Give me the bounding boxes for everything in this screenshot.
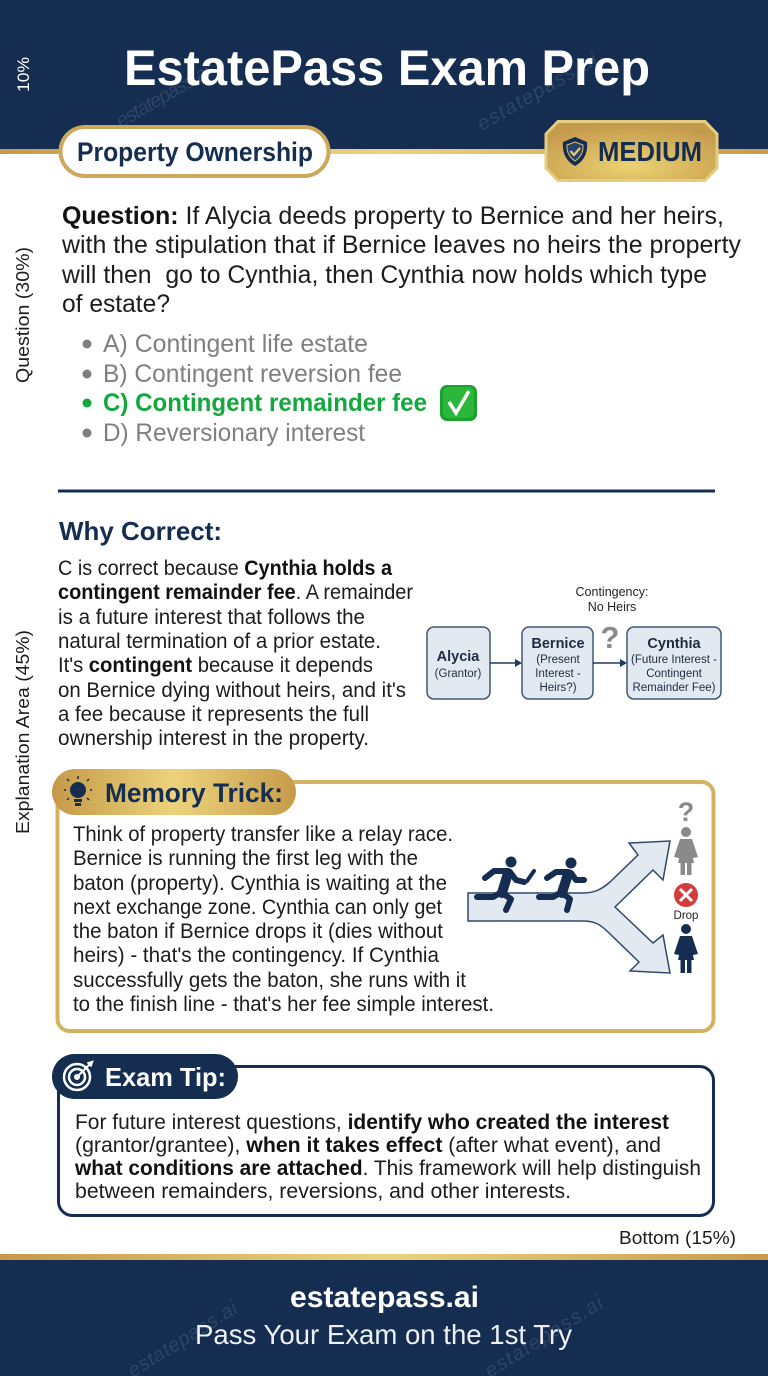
watermarks in footer bbox=[124, 1292, 608, 1376]
forked arrow bbox=[468, 841, 670, 973]
explanation text: on Bernice dying without heirs, and it's bbox=[58, 679, 406, 702]
memory trick text: the baton if Bernice drops it (dies without bbox=[73, 919, 443, 943]
question text: of estate? bbox=[62, 290, 170, 318]
gray question mark: ? bbox=[678, 797, 694, 827]
exam tip text: what conditions are attached. This framework will help distinguish bbox=[74, 1157, 701, 1180]
box: Cynthia: Remainder Fee) bbox=[632, 682, 716, 694]
box: Alycia bbox=[427, 627, 490, 699]
exam tip heading pill bbox=[52, 1054, 238, 1099]
header band bbox=[0, 0, 768, 154]
exam tip text: between remainders, reversions, and other interests. bbox=[75, 1180, 571, 1203]
question text: will then go to Cynthia, then Cynthia now holds which type bbox=[61, 261, 707, 289]
question mark: ? bbox=[601, 620, 619, 655]
difficulty badge: MEDIUM bbox=[598, 136, 702, 167]
panel: memory trick bbox=[52, 769, 714, 1031]
answer options bbox=[82, 330, 427, 447]
icon: target bbox=[64, 1061, 93, 1090]
second runner bbox=[539, 858, 584, 910]
box: Cynthia: Cynthia bbox=[647, 636, 702, 652]
exam tip heading pill: Exam Tip: bbox=[105, 1062, 226, 1092]
footer band bbox=[0, 1254, 768, 1376]
contingency label bbox=[576, 585, 648, 614]
category pill: Property Ownership bbox=[77, 137, 313, 167]
title: EstatePass Exam Prep bbox=[124, 40, 650, 96]
gray person bbox=[674, 827, 698, 875]
memory trick text: heirs) - that's the contingency. If Cynthia bbox=[73, 943, 439, 967]
explanation text: contingent remainder fee. A remainder bbox=[58, 581, 413, 604]
box: Alycia: (Grantor) bbox=[435, 668, 481, 680]
contingency label: No Heirs bbox=[588, 600, 636, 614]
footer website: estatepass.ai bbox=[290, 1281, 479, 1314]
heading: why correct: Why Correct: bbox=[59, 516, 222, 546]
explanation text: C is correct because Cynthia holds a bbox=[58, 557, 392, 580]
explanation text: is a future interest that follows the bbox=[58, 606, 365, 629]
memory trick heading pill bbox=[52, 769, 296, 815]
box: Bernice: (Present bbox=[536, 654, 581, 666]
arrow: Bernice to Cynthia bbox=[593, 659, 627, 667]
box: Bernice bbox=[522, 627, 593, 699]
box: Cynthia bbox=[627, 627, 721, 699]
navy person bbox=[674, 924, 698, 973]
box: Cynthia: (Future Interest - bbox=[631, 654, 717, 666]
watermarks in header: estatepass.ai bbox=[474, 49, 602, 135]
icon: shield bbox=[563, 137, 587, 166]
memory trick text: baton (property). Cynthia is waiting at the bbox=[73, 871, 447, 895]
icon: green check bbox=[440, 385, 477, 421]
icon: light bulb bbox=[64, 776, 92, 806]
answer options: D) Reversionary interest bbox=[103, 419, 365, 447]
section label: question: Question (30%) bbox=[13, 247, 33, 383]
explanation text: It's contingent because it depends bbox=[58, 654, 373, 677]
box: Alycia: Alycia bbox=[437, 649, 480, 665]
memory trick text: next exchange zone. Cynthia can only get bbox=[73, 895, 442, 919]
arrow: Alycia to Bernice bbox=[490, 659, 522, 667]
question text: with the stipulation that if Bernice leaves no heirs the property bbox=[61, 231, 741, 259]
panel: exam tip bbox=[52, 1054, 714, 1216]
explanation text: a fee because it represents the full bbox=[58, 703, 369, 726]
memory trick text: successfully gets the baton, she runs with it bbox=[73, 968, 466, 992]
exam tip text: For future interest questions, identify who created the interest bbox=[75, 1111, 669, 1134]
box: Bernice: Heirs?) bbox=[539, 682, 577, 694]
explanation text: natural termination of a prior estate. bbox=[58, 630, 381, 653]
box: Bernice: Bernice bbox=[531, 636, 585, 652]
explanation text: ownership interest in the property. bbox=[58, 727, 369, 750]
answer options: B) Contingent reversion fee bbox=[103, 360, 402, 388]
footer tagline: Pass Your Exam on the 1st Try bbox=[195, 1319, 572, 1350]
memory trick text: Bernice is running the first leg with the bbox=[73, 846, 418, 870]
question text: Question: If Alycia deeds property to Bernice and her heirs, bbox=[62, 202, 724, 230]
box: Cynthia: Contingent bbox=[646, 668, 703, 680]
answer options: A) Contingent life estate bbox=[103, 330, 368, 358]
category pill bbox=[60, 127, 328, 176]
section label: explanation: Explanation Area (45%) bbox=[13, 630, 33, 834]
box: Bernice: Interest - bbox=[535, 668, 581, 680]
exam tip text: (grantor/grantee), when it takes effect (after what event), and bbox=[75, 1134, 661, 1157]
flow diagram bbox=[427, 585, 721, 699]
drop label: Drop bbox=[674, 910, 698, 922]
memory trick text bbox=[73, 822, 494, 1016]
section label: 10%: 10% bbox=[14, 57, 33, 92]
contingency label: Contingency: bbox=[576, 585, 648, 599]
section label: bottom: Bottom (15%) bbox=[619, 1228, 736, 1248]
difficulty badge bbox=[546, 122, 717, 180]
memory trick text: to the finish line - that's her fee simple interest. bbox=[73, 992, 494, 1016]
question text bbox=[61, 202, 741, 318]
icon: red x bbox=[674, 883, 698, 907]
explanation text bbox=[58, 557, 413, 750]
memory trick heading pill: Memory Trick: bbox=[105, 778, 283, 808]
watermarks in header bbox=[112, 49, 602, 135]
exam tip text bbox=[74, 1111, 701, 1203]
watermarks in header: estatepass.ai bbox=[112, 61, 215, 132]
runner with baton bbox=[477, 856, 534, 910]
memory trick text: Think of property transfer like a relay race. bbox=[73, 822, 453, 846]
relay race illustration bbox=[468, 797, 698, 973]
answer options: C) Contingent remainder fee bbox=[103, 389, 427, 417]
